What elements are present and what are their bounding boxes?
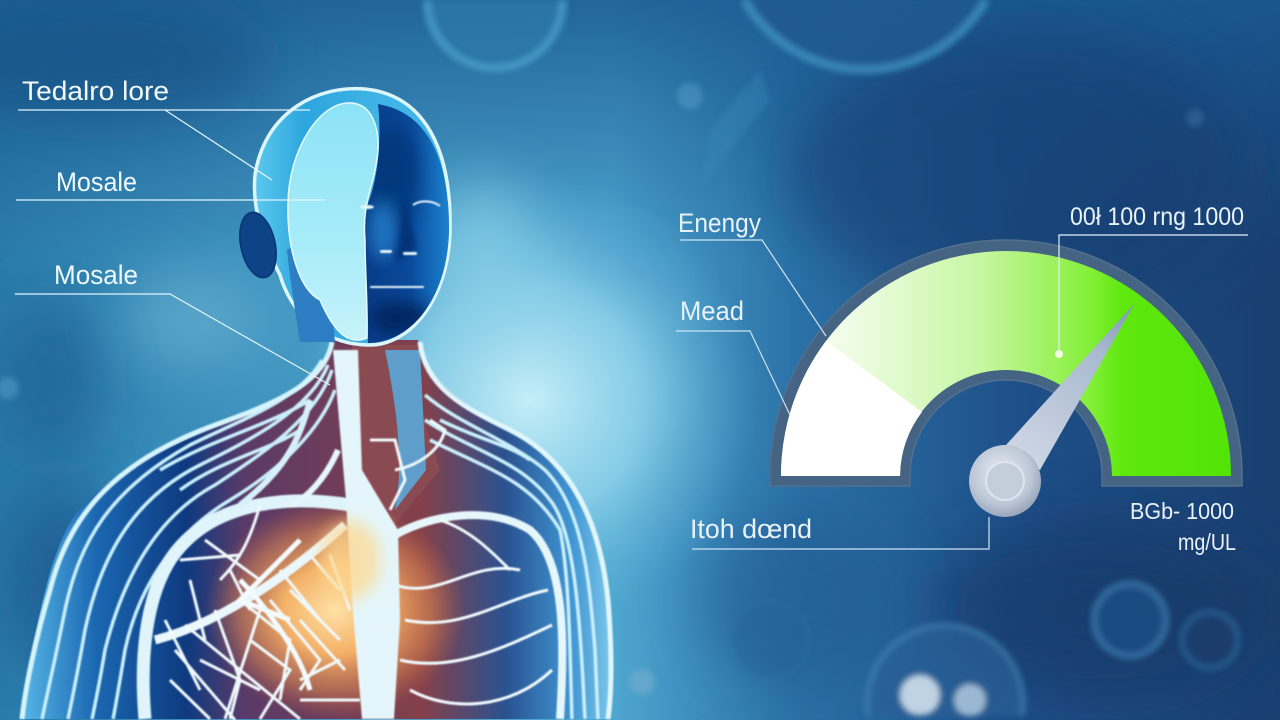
arms: [42, 360, 598, 719]
label: range: mg/UL: [1178, 529, 1236, 555]
torso: [20, 340, 611, 719]
left labels: [15, 76, 330, 385]
label: lower: Mosale: [54, 260, 138, 290]
label: bottom: [690, 514, 989, 549]
spine: [333, 350, 400, 719]
label: range: [1130, 498, 1236, 555]
ear: [235, 209, 281, 281]
gauge arc fill: [781, 251, 1231, 476]
neck: [352, 345, 440, 530]
label: mead: Mead: [680, 296, 744, 326]
gauge labels: [676, 203, 1248, 555]
gauge: [770, 240, 1242, 517]
face: [362, 104, 449, 343]
label: bottom: Itoh dœnd: [690, 514, 812, 544]
spine glow: [320, 520, 380, 600]
label: mead: [676, 296, 790, 415]
label: lower: [15, 260, 330, 385]
hub: [969, 445, 1041, 517]
label: top value: [1059, 203, 1248, 354]
face shadows: [369, 125, 430, 336]
label: energy: [678, 208, 826, 336]
head: [254, 89, 450, 345]
label: top: [18, 76, 310, 180]
neck inside head: [287, 247, 335, 342]
body nerves: [22, 342, 611, 720]
marker dot: [1055, 350, 1063, 358]
facial features: [360, 201, 440, 288]
label: energy: Enengy: [678, 208, 761, 238]
needle: [1006, 303, 1135, 470]
thick vessels: [143, 501, 350, 719]
brain lobe: [288, 103, 378, 340]
label: top value: 00ł 100 rng 1000: [1070, 203, 1244, 231]
label: top: Tedalro lore: [22, 76, 169, 106]
gauge outer rim: [770, 240, 1242, 486]
white segment: [781, 341, 922, 476]
label: middle: Mosale: [56, 167, 137, 197]
heart glow: [205, 501, 465, 719]
label: range: BGb- 1000: [1130, 498, 1234, 524]
chest lines: [165, 420, 552, 720]
shoulder outlines: [22, 342, 332, 719]
human figure: [20, 89, 611, 720]
